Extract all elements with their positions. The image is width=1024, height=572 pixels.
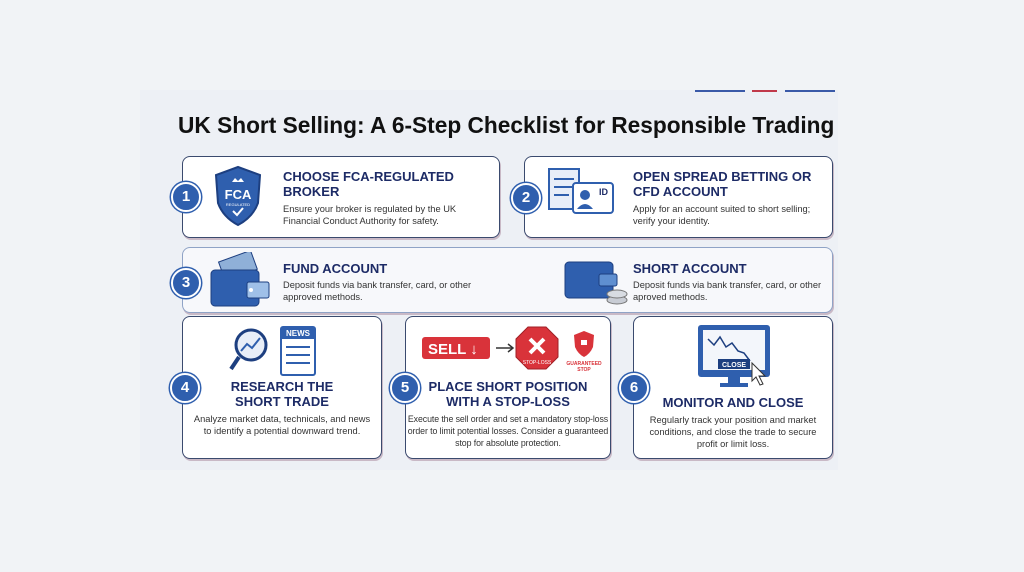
icon: FCA shield: REGULATED <box>226 202 250 207</box>
step 1: 1 <box>182 188 190 205</box>
card 5 <box>405 316 611 459</box>
icon: sell / stop-loss / guaranteed stop: SELL ↓ <box>428 341 478 358</box>
row 3 panel <box>182 247 833 313</box>
step 1 <box>171 182 201 212</box>
heading 5: WITH A STOP-LOSS <box>446 394 570 409</box>
text 3a: Deposit funds via bank transfer, card, or other approved methods. <box>283 280 471 302</box>
step 5 <box>390 373 420 403</box>
step 3 <box>171 268 201 298</box>
text 4: Analyze market data, technicals, and news to identify a potential downward trend. <box>194 414 370 436</box>
heading 5: PLACE SHORT POSITION <box>429 379 587 394</box>
icon: FCA shield <box>214 166 262 226</box>
icon: wallet <box>210 252 270 306</box>
step 3: 3 <box>182 274 190 291</box>
card 4 <box>182 316 382 459</box>
icon: ID document: ID <box>599 187 609 197</box>
heading 5 <box>429 379 587 409</box>
step 4: 4 <box>181 379 189 396</box>
icon: research magnifier and news <box>229 326 316 376</box>
text 2: Apply for an account suited to short selling; verify your identity. <box>633 204 810 226</box>
heading 4: RESEARCH THE <box>231 379 333 394</box>
step 6 <box>619 373 649 403</box>
icon: sell / stop-loss / guaranteed stop: STOP <box>577 367 591 373</box>
icon: ID document <box>548 168 614 214</box>
step 6: 6 <box>630 379 638 396</box>
card 1 <box>182 156 500 238</box>
step 4 <box>170 373 200 403</box>
heading 6: MONITOR AND CLOSE <box>663 395 803 410</box>
step 2: 2 <box>522 189 530 206</box>
icon: wallet with coins <box>564 262 628 304</box>
decorative top lines <box>695 90 745 92</box>
heading 4 <box>231 379 333 409</box>
icon: sell / stop-loss / guaranteed stop <box>422 326 602 373</box>
card 2 <box>524 156 833 238</box>
heading 3a: FUND ACCOUNT <box>283 261 387 276</box>
icon: sell / stop-loss / guaranteed stop: GUARANTEED <box>566 361 602 367</box>
title: UK Short Selling: A 6-Step Checklist for Responsible Trading <box>178 112 834 138</box>
text 1: Ensure your broker is regulated by the UK Financial Conduct Authority for safety. <box>283 204 456 226</box>
icon: monitor with chart and close button: CLOSE <box>722 362 746 369</box>
icon: FCA shield: FCA <box>225 187 252 202</box>
heading 3b: SHORT ACCOUNT <box>633 261 747 276</box>
text 3b: Deposit funds via bank transfer, card, or other aproved methods. <box>633 280 821 302</box>
text 5: Execute the sell order and set a mandatory stop-loss order to limit potential losses. Consider a guaranteed stop for absolute protection. <box>408 414 608 448</box>
icon: research magnifier and news: NEWS <box>286 329 311 338</box>
card 6 <box>633 316 833 459</box>
content panel <box>140 90 838 470</box>
heading 1: CHOOSE FCA-REGULATED BROKER <box>283 169 454 199</box>
icon: sell / stop-loss / guaranteed stop: STOP-LOSS <box>523 360 552 366</box>
step 5: 5 <box>401 379 409 396</box>
step 2 <box>511 183 541 213</box>
text 6: Regularly track your position and market conditions, and close the trade to secure profit or limit loss. <box>650 415 816 449</box>
heading 4: SHORT TRADE <box>235 394 329 409</box>
heading 2: OPEN SPREAD BETTING OR CFD ACCOUNT <box>633 169 811 199</box>
icon: monitor with chart and close button <box>698 325 770 387</box>
